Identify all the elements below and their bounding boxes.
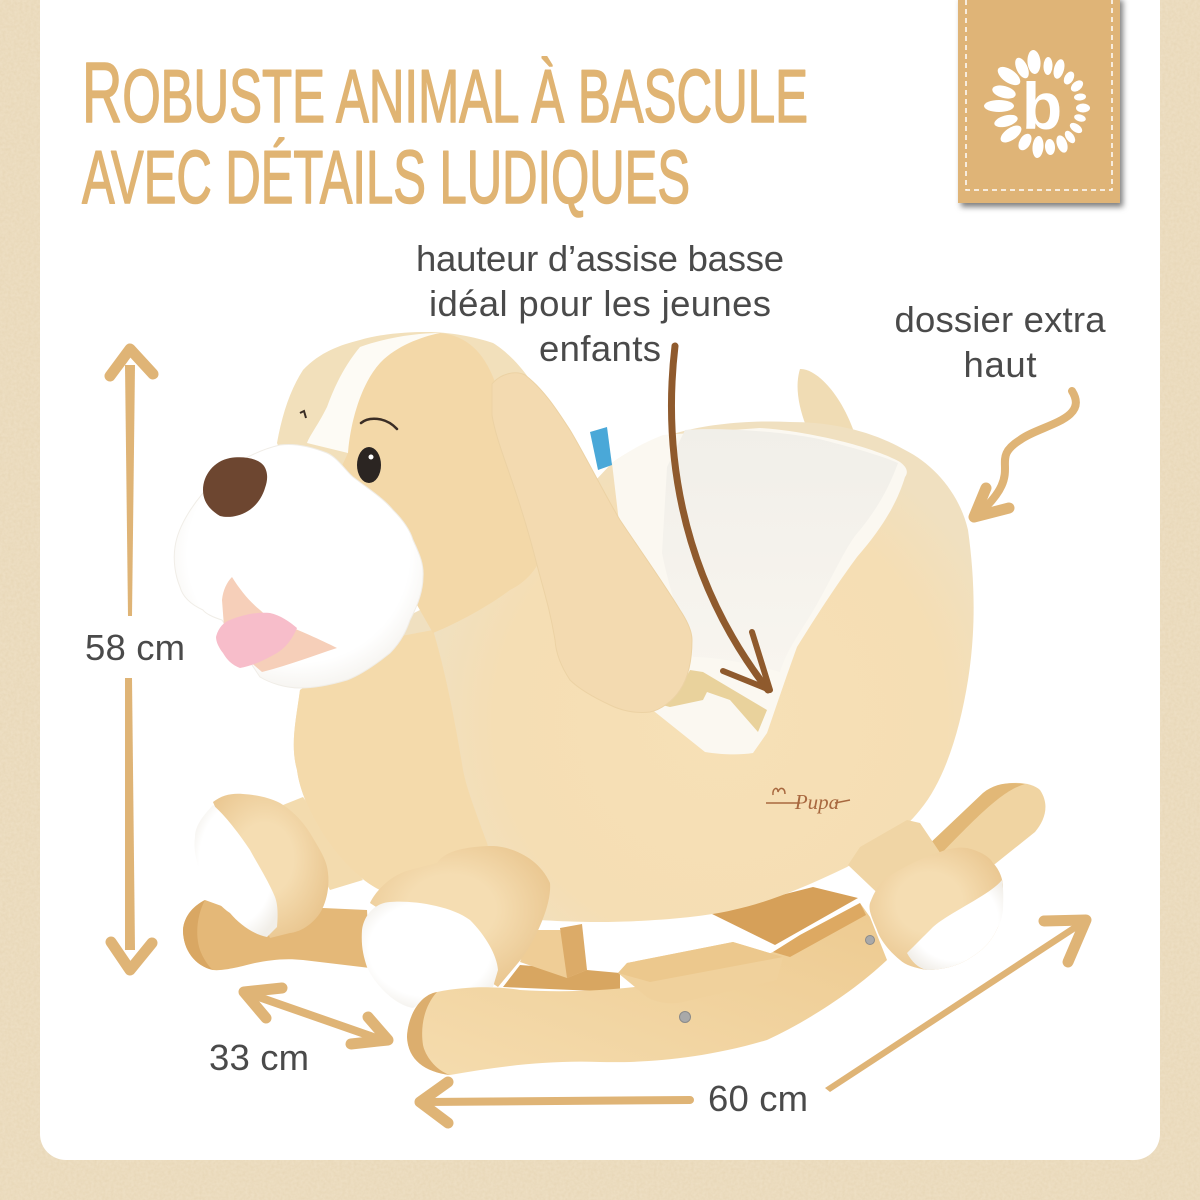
back rocker xyxy=(183,887,858,970)
embroidered signature: Pupa xyxy=(794,790,839,814)
back left leg stub xyxy=(283,797,363,890)
arrow: width 60 cm xyxy=(420,1082,690,1123)
label: seat height xyxy=(416,238,784,369)
white blaze xyxy=(307,333,440,453)
body xyxy=(294,421,974,922)
icon: sun logo xyxy=(984,49,1090,158)
arrow: brown seat height xyxy=(672,346,770,690)
far eyebrow xyxy=(300,411,306,418)
title xyxy=(82,46,808,219)
screws xyxy=(680,936,874,1022)
label: backrest: dossier extra xyxy=(894,299,1106,340)
seat interior xyxy=(662,429,898,672)
face xyxy=(340,333,543,633)
chest panel xyxy=(294,630,500,916)
label: seat height: enfants xyxy=(539,328,661,369)
back left foot xyxy=(194,794,328,938)
brand tag with logo xyxy=(958,0,1120,203)
eye xyxy=(357,447,381,483)
rocking dog illustration xyxy=(174,332,1045,1075)
title: ROBUSTE ANIMAL À BASCULE xyxy=(82,46,808,141)
label: 58 cm: 58 cm xyxy=(85,627,185,668)
label: backrest: haut xyxy=(964,344,1036,385)
muzzle xyxy=(174,444,423,688)
footrest xyxy=(618,942,783,1003)
icon: sun logo: b xyxy=(1022,69,1062,143)
right leg xyxy=(848,820,1003,970)
front left leg xyxy=(362,846,550,1008)
arrow: backrest xyxy=(974,391,1076,517)
seat belt xyxy=(658,670,767,732)
embroidered signature xyxy=(766,788,850,814)
eyebrow xyxy=(361,419,397,429)
arrow: height 58 cm xyxy=(110,349,153,970)
rocker deck and support block xyxy=(503,924,620,992)
arrow: depth 33 cm xyxy=(244,988,388,1044)
seat rim and back xyxy=(612,428,907,754)
label: seat height: idéal pour les jeunes xyxy=(429,283,771,324)
tail xyxy=(798,369,854,432)
front rocker xyxy=(407,783,1045,1075)
label: 60 cm: 60 cm xyxy=(708,1078,808,1119)
arrow: diagonal width xyxy=(825,917,1088,1092)
tongue xyxy=(216,613,297,668)
label: seat height: hauteur d’assise basse xyxy=(416,238,784,279)
ear xyxy=(492,373,692,713)
nose xyxy=(203,457,267,517)
mouth xyxy=(222,577,337,672)
head xyxy=(174,332,543,688)
label: backrest xyxy=(894,299,1106,385)
title: AVEC DÉTAILS LUDIQUES xyxy=(82,135,690,219)
back of head xyxy=(277,332,530,600)
label: 33 cm: 33 cm xyxy=(209,1037,309,1078)
blue label xyxy=(590,427,612,470)
